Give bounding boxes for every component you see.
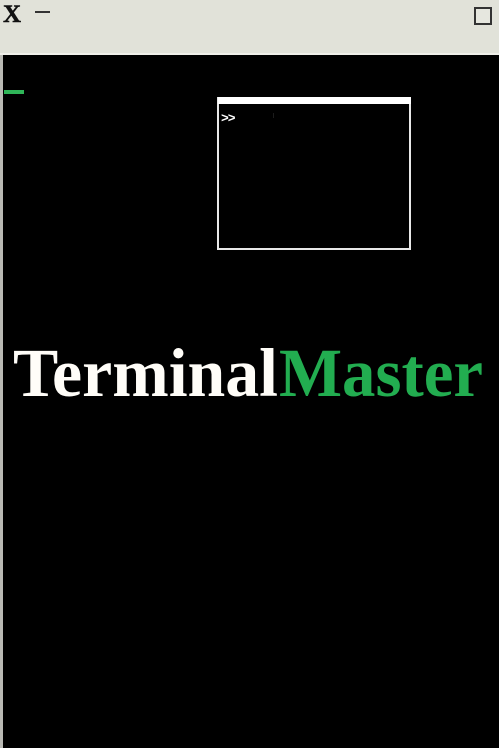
title: TerminalMaster (13, 335, 483, 411)
icon: maximize button (475, 8, 491, 24)
prompt symbol: >> (221, 111, 236, 126)
title: TerminalMaster: Master (279, 335, 483, 411)
icon: minimize button (35, 11, 50, 13)
icon: close button X: X (3, 1, 21, 28)
green cursor dash (4, 90, 24, 94)
cursor speck (273, 113, 274, 118)
title: TerminalMaster: Terminal (13, 335, 278, 411)
inner terminal window (218, 97, 411, 249)
